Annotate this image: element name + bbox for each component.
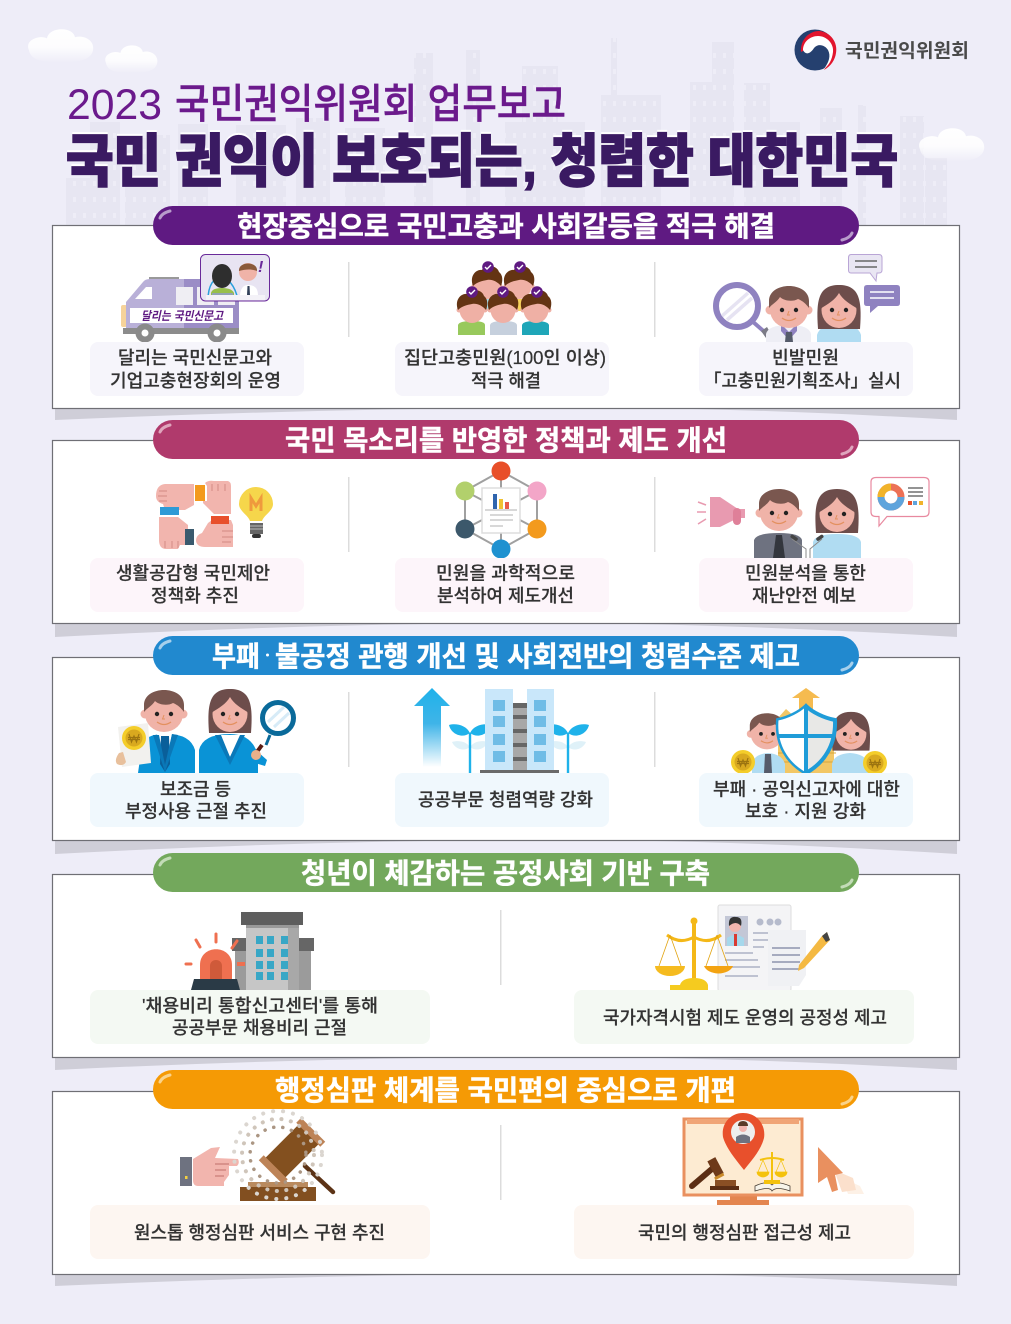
captions: 「고충민원기획조사」 <box>704 371 868 391</box>
captions <box>90 558 913 612</box>
icon: 달리는 국민신문고 bus <box>121 254 270 342</box>
icon: pointing hand and gavel <box>180 1111 333 1201</box>
heading bar: 부패 <box>212 641 260 672</box>
captions: 부정사용 근절 추진 <box>125 802 267 822</box>
icon: data analysis network <box>456 462 546 558</box>
captions: 원스톱 행정심판 서비스 구현 추진 <box>134 1223 385 1243</box>
icon: 달리는 국민신문고 bus: ! <box>258 259 264 276</box>
panel: 청년 공정사회 <box>52 853 960 1070</box>
icon: inspectors with coin document and magnifier <box>116 689 294 773</box>
captions: 기업고충현장회의 운영 <box>110 371 281 391</box>
panel: 국민 목소리 <box>52 420 960 637</box>
captions: 공공부문 채용비리 근절 <box>172 1018 347 1038</box>
panel: 현장중심 <box>52 206 960 420</box>
icon: whistleblower protection shield <box>731 688 887 775</box>
panel: 부패 불공정 <box>52 636 960 854</box>
captions: 부패 · 공익신고자에 대한 <box>713 780 900 800</box>
logo: Taegeuk emblem and organisation name: 국민권익위원회 <box>845 40 969 62</box>
clouds <box>28 29 984 161</box>
icon: group of petitioners <box>456 261 552 335</box>
captions: '채용비리 통합신고센터'를 통해 <box>142 996 378 1016</box>
heading bar: 국민 목소리를 반영한 정책과 제도 개선 <box>285 425 727 456</box>
captions: 실시 <box>868 371 901 391</box>
icon: integrity growth building <box>414 688 589 774</box>
title: main heading: 국민 권익이 보호되는, 청렴한 대한민국 <box>66 130 898 194</box>
captions: 민원분석을 통한 <box>745 564 866 584</box>
title: subtitle line: 국민권익위원회 업무보고 <box>175 81 566 127</box>
heading bar: 현장중심으로 국민고충과 사회갈등을 적극 해결 <box>237 211 775 242</box>
captions: 보조금 등 <box>160 780 231 800</box>
captions <box>90 990 914 1044</box>
captions: 분석하여 제도개선 <box>437 586 574 606</box>
captions: 재난안전 예보 <box>752 586 856 606</box>
heading bar: 행정심판 체계를 국민편의 중심으로 개편 <box>275 1075 736 1106</box>
captions <box>90 773 913 827</box>
captions: 적극 해결 <box>471 371 541 391</box>
heading bar <box>153 853 859 892</box>
captions: 집단고충민원(100인 이상) <box>404 348 606 368</box>
heading bar: 청년이 체감하는 공정사회 기반 구축 <box>301 858 710 889</box>
icon: siren and government building <box>186 912 314 990</box>
icon: scales, resume and pencil <box>655 905 830 991</box>
heading bar <box>153 636 859 675</box>
captions: 민원을 과학적으로 <box>436 564 575 584</box>
captions <box>90 342 913 396</box>
captions: 국가자격시험 제도 운영의 공정성 제고 <box>603 1008 887 1028</box>
heading bar: 불공정 관행 개선 및 사회전반의 청렴수준 제고 <box>275 641 800 672</box>
icon: four joined hands <box>156 481 273 549</box>
heading bar <box>153 1070 859 1109</box>
title: subtitle line: 2023 <box>67 81 162 129</box>
panel: 행정심판 <box>52 1070 960 1286</box>
title: main heading: 국민 권익이 보호되는, 청렴한 대한민국 <box>66 128 898 192</box>
icon: 달리는 국민신문고 bus: 달리는 국민신문고 <box>141 309 224 323</box>
icon: analysts with magnifier and speech bubbles <box>716 254 900 342</box>
captions <box>90 1205 914 1259</box>
icon: monitor with location pin and arrow cursor <box>684 1113 864 1205</box>
city skyline backdrop <box>66 38 947 228</box>
captions: 생활공감형 국민제안 <box>116 564 270 584</box>
heading bar <box>153 206 859 245</box>
logo: Taegeuk emblem and organisation name <box>794 30 969 70</box>
captions: 공공부문 청렴역량 강화 <box>418 790 593 810</box>
captions: 달리는 국민신문고와 <box>118 348 272 368</box>
captions: 국민의 행정심판 접근성 제고 <box>638 1223 851 1243</box>
icon: megaphone and briefing presenters <box>697 478 929 558</box>
captions: 보호 · 지원 강화 <box>745 802 866 822</box>
heading bar <box>153 420 859 459</box>
captions: 정책화 추진 <box>151 586 239 606</box>
captions: 빈발민원 <box>772 348 839 368</box>
